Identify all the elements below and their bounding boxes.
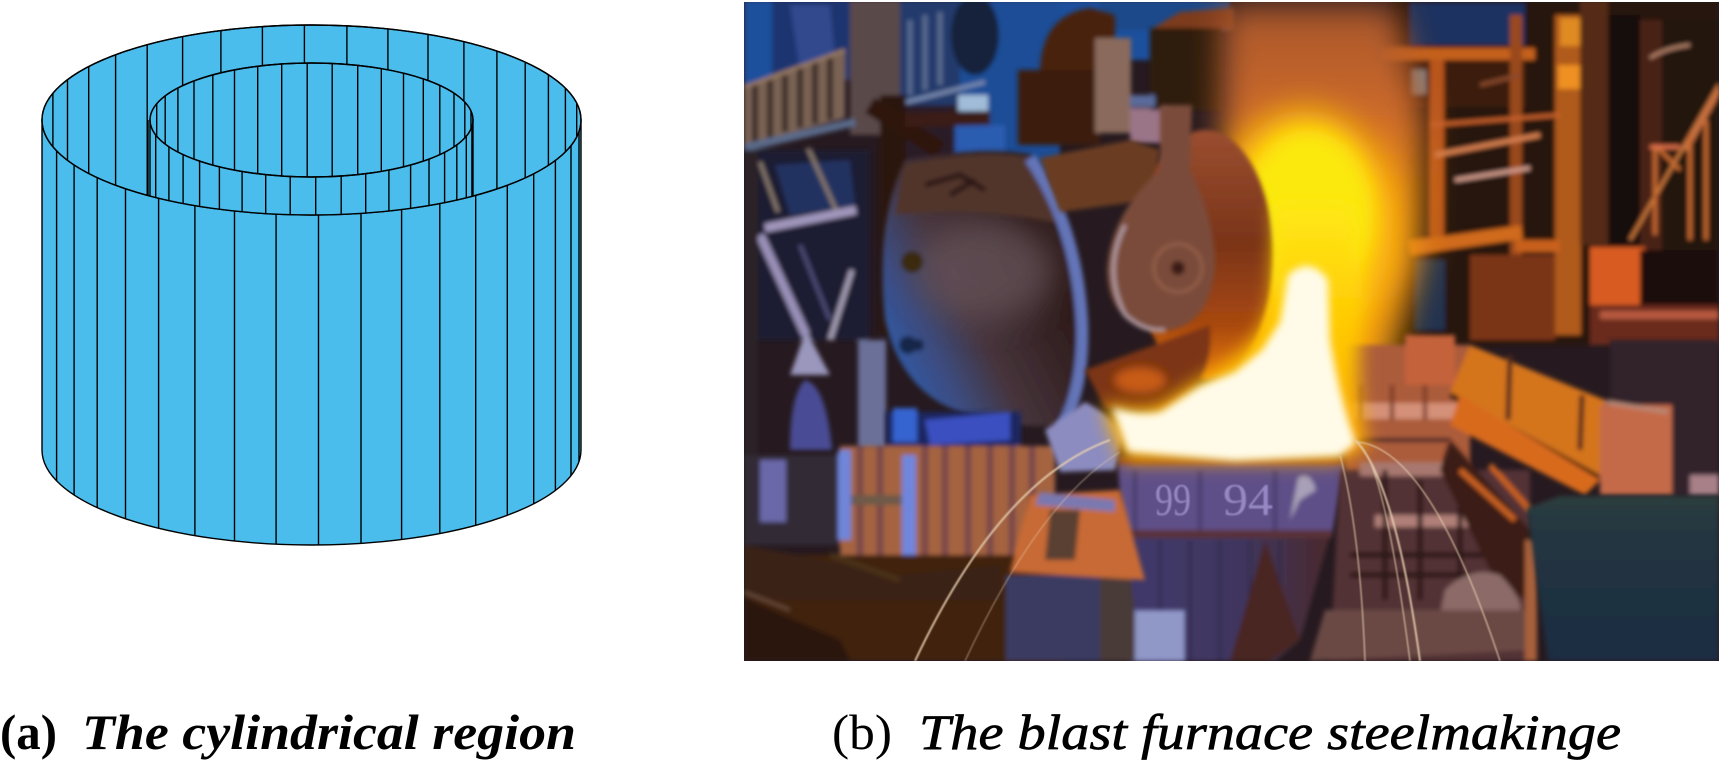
molten metal stream and pool xyxy=(1104,205,1368,462)
panel: cylindrical region diagram xyxy=(42,20,581,550)
molten metal sparks xyxy=(915,440,1500,661)
worker xyxy=(1005,402,1185,661)
caption: panel b: The blast furnace steelmakinge xyxy=(919,704,1621,760)
pulley wheel and arm xyxy=(1107,105,1215,331)
main ladle drum xyxy=(882,151,1082,428)
pipes and boxes on the crane xyxy=(1018,8,1234,145)
caption: panel a: The cylindrical region xyxy=(82,704,576,760)
right side platform and ramp xyxy=(1345,335,1719,500)
flame glow xyxy=(1217,5,1425,380)
panel: blast furnace photograph xyxy=(744,0,1719,661)
outer cylinder front wall xyxy=(42,120,581,550)
dark tub, lower right xyxy=(1527,496,1719,661)
caption: panel b: (b) xyxy=(832,704,892,760)
lower left fence and floor xyxy=(744,408,1064,661)
outer rim outline xyxy=(42,25,581,215)
caption: panel a: (a) xyxy=(0,704,57,760)
industrial structure, upper left xyxy=(744,0,1230,460)
lower centre machinery xyxy=(1310,440,1537,661)
crucible marking: 94 xyxy=(1223,474,1273,525)
crucible marking xyxy=(1156,484,1273,516)
inner cylinder outer surface xyxy=(148,119,474,214)
background steel structure, upper right xyxy=(1380,0,1719,345)
photo background xyxy=(744,2,1719,661)
rear wheel rim and pouring lip xyxy=(1040,130,1273,412)
inner cylinder top opening xyxy=(150,60,473,180)
crucible marking: 99 xyxy=(1155,474,1191,525)
steel crucible xyxy=(1118,456,1348,661)
outer cylinder top opening xyxy=(42,20,581,220)
